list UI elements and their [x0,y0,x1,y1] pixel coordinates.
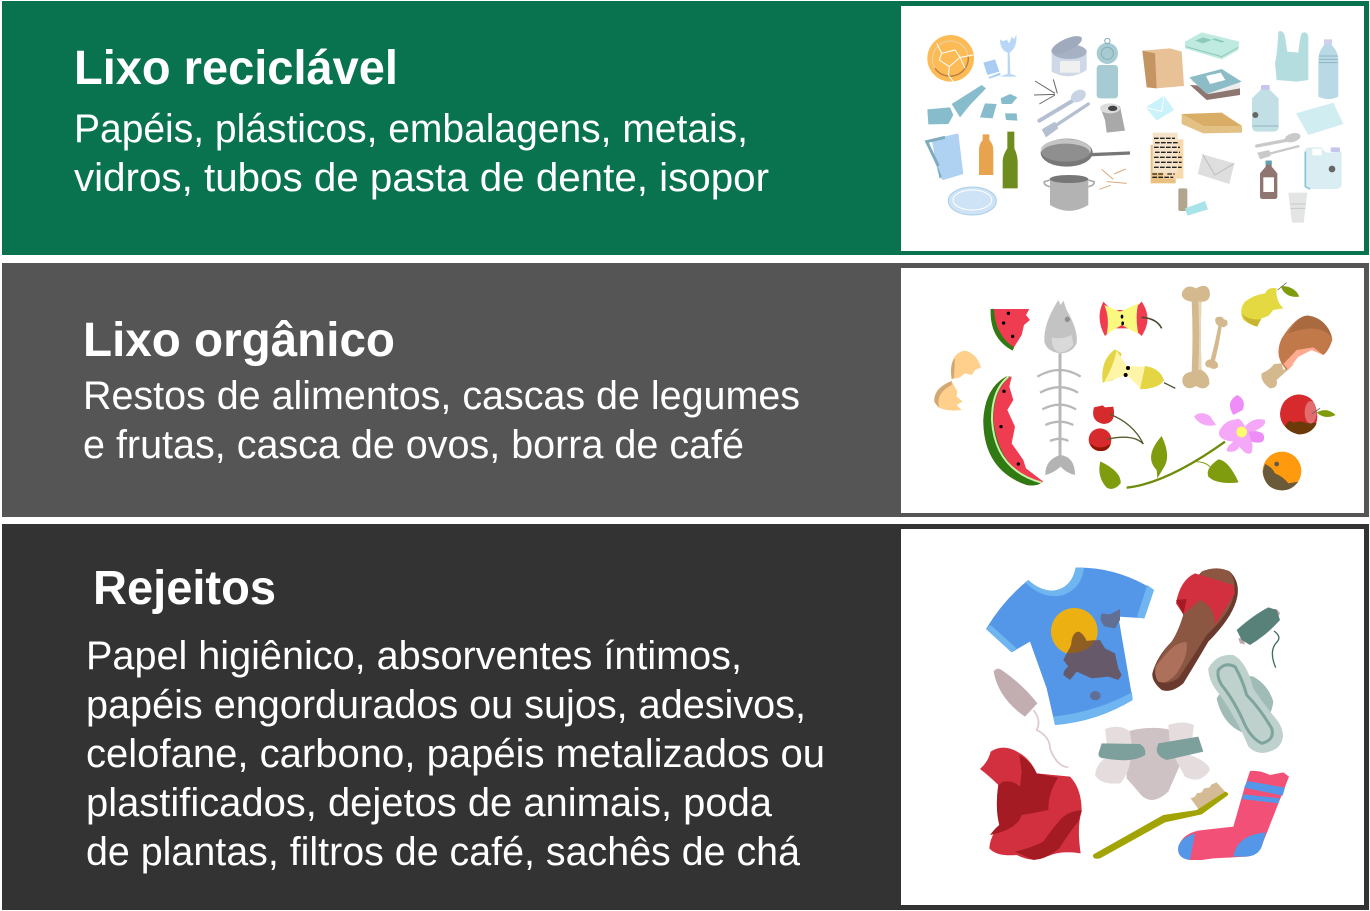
icon: small bone [1205,317,1228,369]
text block: rejects list: plastificados, dejetos de animais, poda [86,781,773,825]
icon: broken orange plate [927,35,974,82]
icon: red rag [980,748,1082,860]
icon: rotten apple [1280,394,1336,434]
text block: recyclable list: vidros, tubos de pasta de dente, isopor [74,156,769,200]
image area: recyclable items [901,6,1364,251]
icon: open tin can [1049,33,1087,76]
text block: organic list: Restos de alimentos, cascas de legumes [83,374,800,418]
icon: plastic cup [1288,193,1307,223]
illustration: non-recyclable items [980,568,1289,860]
icon: large bone [1182,286,1210,388]
icon: chicken leg [1261,316,1332,388]
icon: eaten watermelon rind [983,377,1043,485]
icon: toilet roll tubes [1178,188,1208,216]
icon: cardboard box [1182,113,1242,133]
heading: Lixo reciclável: Lixo reciclável [74,42,398,95]
icon: fish skeleton [1037,300,1081,475]
icon: used tampon with string [1237,607,1280,668]
icon: books [1189,69,1242,100]
text block: rejects list: papéis engordurados ou sujos, adesivos, [86,683,806,727]
icon: paper bag [1142,48,1184,88]
icon: glass shards [980,94,1017,121]
icon: egg shells [934,351,981,411]
icon: diaper [1095,722,1210,800]
icon: glass fragment [983,59,1001,79]
icon: nails [1034,79,1057,104]
icon: brown bottle [1260,161,1277,199]
icon: slipper [1152,568,1238,691]
text block: organic list [83,374,800,467]
panel: lixo reciclável [2,1,1369,255]
icon: rotten orange [1263,452,1301,490]
text block: rejects list: Papel higiênico, absorventes íntimos, [86,634,742,678]
icon: watermelon slice [991,309,1030,351]
icon: toothbrush [1093,782,1228,859]
panel: lixo orgânico [2,263,1369,517]
text block: recyclable list: Papéis, plásticos, embalagens, metais, [74,107,748,151]
image area: non-recyclable items [901,529,1364,905]
icon: sock [1178,771,1289,860]
icon: broken bottle [927,85,986,124]
icon: cooking pot [1044,175,1094,211]
icon: blue envelope [1146,96,1174,121]
icon: water gallon [1252,85,1279,132]
icon: plastic jug [1304,147,1342,189]
heading: Lixo orgânico: Lixo orgânico [83,314,395,367]
icon: pear core [1102,349,1175,389]
icon: crushed can [1100,103,1125,133]
heading: Rejeitos: Rejeitos [93,562,276,615]
icon: water bottle [1318,39,1338,99]
icon: plastic cutlery [1257,131,1302,159]
image area: organic items [901,268,1364,513]
icon: newspaper [1185,32,1239,59]
icon: apple core [1100,302,1162,336]
icon: orange bottle [979,134,993,175]
icon: spoon and fork [1039,87,1088,137]
text block: organic list: e frutas, casca de ovos, borra de café [83,423,744,467]
icon: broken wine glass [1000,35,1017,77]
icon: flower branch [1127,395,1265,488]
icon: green bottle [1003,132,1018,188]
icon: sanitary pad [1208,655,1283,753]
icon: cherries [1089,405,1143,451]
icon: tampon [994,669,1068,767]
icon: leaf [1099,461,1121,489]
icon: stained t-shirt [986,568,1154,725]
text block: recyclable list [74,107,769,200]
icon: documents [1151,133,1183,183]
text block: rejects list: celofane, carbono, papéis metalizados ou [86,732,825,776]
icon: plastic bag [1275,31,1308,82]
icon: round plastic plate [948,187,996,215]
icon: frying pan [1041,139,1130,167]
icon: grey envelope [1198,154,1234,184]
icon: tall can with lid [1097,38,1118,98]
illustration: recyclable items [927,31,1343,223]
icon: eaten pear [1241,283,1299,327]
text block: rejects list [86,634,825,874]
icon: copper nails [1099,169,1127,189]
illustration: organic items [934,283,1336,490]
icon: glass jug [927,133,963,180]
icon: crumpled plastic [1296,103,1343,135]
text block: rejects list: de plantas, filtros de café, sachês de chá [86,830,801,874]
panel: rejeitos [2,524,1369,910]
